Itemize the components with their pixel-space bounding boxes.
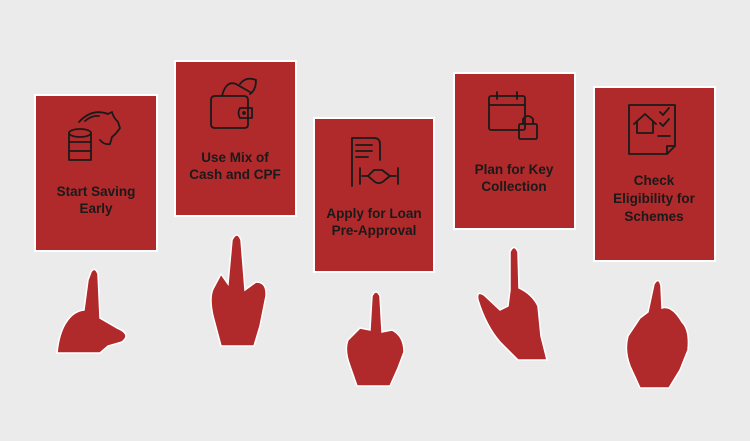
text: start saving early xyxy=(57,184,135,216)
text: plan for key collection: Collection xyxy=(481,179,547,194)
icon: hand 4 xyxy=(478,248,547,360)
text: plan for key collection: Plan for Key xyxy=(475,162,554,177)
text: apply for loan pre-approval: Apply for Loan xyxy=(326,206,422,221)
panel: use mix of cash and cpf xyxy=(175,61,296,216)
text: plan for key collection xyxy=(475,162,554,194)
icon: hand 1 xyxy=(57,269,126,353)
panel: check eligibility for schemes xyxy=(594,87,715,261)
text: use mix of cash and cpf xyxy=(189,150,281,182)
icon: piggy bank with coins xyxy=(69,112,120,160)
text: apply for loan pre-approval: Pre-Approval xyxy=(332,223,416,238)
text: check eligibility for schemes: Check xyxy=(634,173,675,188)
icon: hand 3 xyxy=(346,292,404,386)
icon: document with handshake xyxy=(352,138,398,186)
panel: plan for key collection xyxy=(454,73,575,229)
icon: hand 2 xyxy=(211,235,266,346)
text: check eligibility for schemes xyxy=(613,173,696,224)
text: apply for loan pre-approval xyxy=(326,206,422,238)
text: check eligibility for schemes: Schemes xyxy=(624,209,684,224)
icon: checklist with house xyxy=(629,105,675,154)
text: start saving early: Start Saving xyxy=(57,184,135,199)
panel: start saving early xyxy=(35,95,157,251)
text: check eligibility for schemes: Eligibility for xyxy=(613,191,696,206)
text: use mix of cash and cpf: Cash and CPF xyxy=(189,167,281,182)
icon: wallet xyxy=(211,79,256,128)
text: use mix of cash and cpf: Use Mix of xyxy=(201,150,269,165)
icon: calendar with lock xyxy=(489,92,537,139)
panel: apply for loan pre-approval xyxy=(314,118,434,272)
icon: hand 5 xyxy=(626,280,688,388)
text: start saving early: Early xyxy=(79,201,113,216)
